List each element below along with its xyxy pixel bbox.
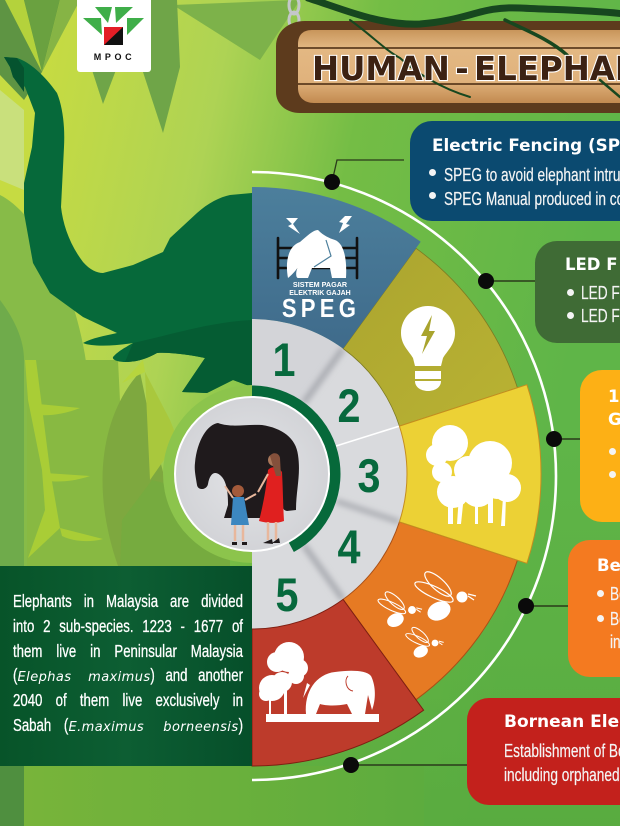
elephant silhouette — [4, 57, 252, 393]
sector 3: yellow — [399, 385, 541, 563]
paragraph: elephants in Malaysia: Elephas maximus — [17, 670, 150, 685]
paragraph: elephants in Malaysia: them live in Peninsular Malaysia — [12, 641, 242, 661]
paragraph: elephants in Malaysia: into 2 sub-species. 1223 - 1677 of — [12, 616, 242, 636]
sector 1: SPEG — [252, 187, 421, 349]
number 2: 2 — [337, 381, 361, 433]
centre circle with ring — [163, 385, 341, 563]
number 5: 5 — [275, 570, 299, 622]
sector 5: red — [252, 599, 424, 766]
icon: trees — [426, 425, 521, 526]
panel: beehive fencing — [568, 540, 620, 677]
number 1: 1 — [272, 335, 296, 387]
hanging chain — [289, 0, 299, 28]
icon: SPEG electric fence elephant: SPEG — [282, 294, 360, 323]
paragraph: elephants in Malaysia: Elephants in Malaysia are divided — [12, 591, 242, 611]
wheel: number ring — [252, 319, 407, 629]
sector 4: orange — [343, 522, 517, 700]
icon: elephant and tree — [259, 642, 379, 722]
sector 2: olive — [343, 248, 517, 426]
paragraph: elephants in Malaysia: ( ) and another — [12, 665, 242, 685]
paragraph: elephants in Malaysia: Sabah ( ) — [12, 715, 242, 735]
paragraph: elephants in Malaysia: 2040 of them live exclusively in — [12, 690, 242, 710]
outer white arc — [252, 172, 556, 780]
connector dots and lines — [324, 160, 580, 773]
panel: 1 million trees — [580, 370, 620, 522]
number 4: 4 — [337, 522, 361, 574]
panel: bornean elephant: including orphaned — [504, 765, 620, 785]
number 3: 3 — [357, 451, 381, 503]
icon: bees — [376, 568, 476, 660]
paragraph: elephants in Malaysia: E.maximus borneensis — [68, 720, 238, 735]
logo: MPOC — [77, 0, 151, 72]
icon: light bulb — [401, 306, 455, 391]
panel: 1 million trees: 1 — [608, 387, 619, 406]
panel: bornean elephant — [467, 698, 620, 805]
panel: text background — [0, 566, 252, 766]
vines — [308, 0, 620, 97]
panel: LED fencing: LED F — [565, 255, 618, 274]
wooden sign — [276, 0, 620, 113]
panel: LED fencing — [535, 241, 620, 343]
logo: MPOC: MPOC — [94, 52, 135, 62]
illustration: elephant with woman and child — [195, 423, 299, 545]
icon: SPEG electric fence elephant: SISTEM PAGAR — [293, 280, 348, 289]
panel: electric fencing — [410, 121, 620, 221]
icon: SPEG electric fence elephant: ELEKTRIK GAJAH — [289, 290, 351, 297]
paragraph: elephants in Malaysia — [12, 591, 244, 735]
icon: SPEG electric fence elephant — [278, 216, 360, 323]
